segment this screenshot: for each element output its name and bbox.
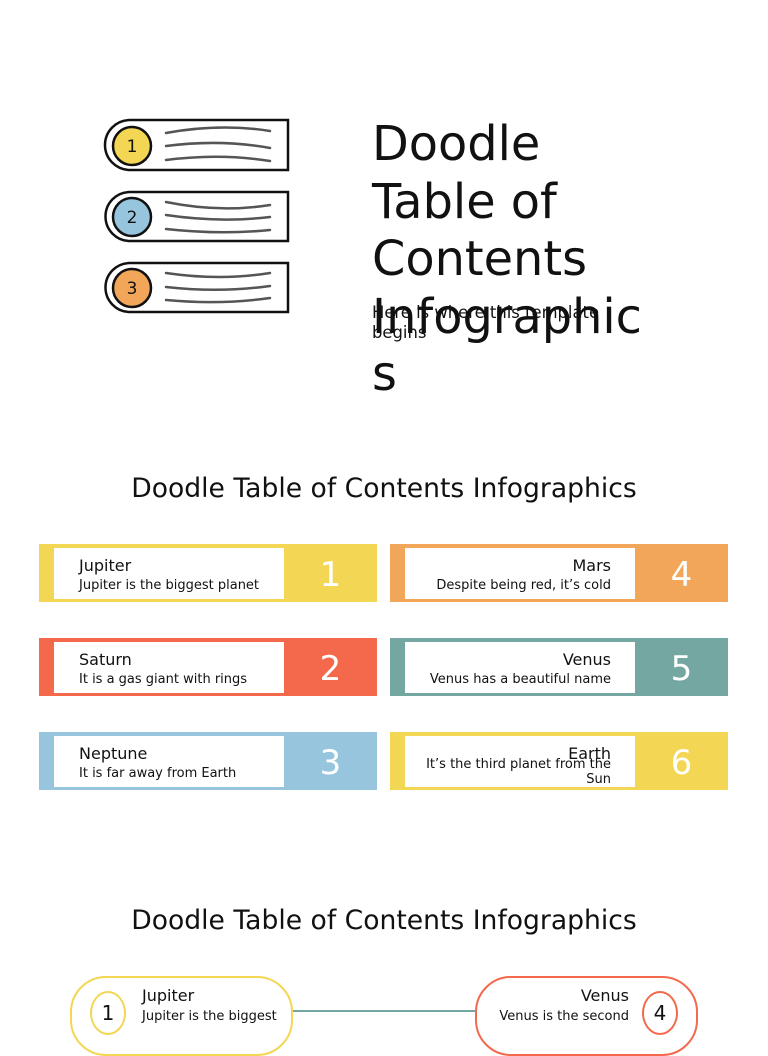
card: Mars: 4 (671, 555, 692, 595)
icon: table of contents doodle: 1 (127, 137, 137, 157)
pill: Venus: Venus is the second (499, 1009, 629, 1024)
card: Jupiter: Jupiter (79, 556, 131, 575)
title: Contents (372, 232, 587, 287)
card: Jupiter: 1 (320, 555, 341, 595)
card: Earth: 6 (671, 743, 692, 783)
card: Venus: Venus (563, 650, 611, 669)
card: Saturn (39, 638, 377, 696)
pill: Venus: Venus (581, 986, 629, 1005)
card: Venus: Venus has a beautiful name (430, 672, 611, 687)
pill: Jupiter: 1 (102, 1001, 114, 1025)
card: Jupiter (39, 544, 377, 602)
card: Neptune (39, 732, 377, 790)
subtitle: Here is where this template begins (372, 303, 599, 342)
card: Saturn: 2 (320, 649, 341, 689)
title: s (372, 347, 397, 402)
card: Venus (390, 638, 728, 696)
section heading 2: Doodle Table of Contents Infographics (131, 905, 637, 936)
icon: table of contents doodle (104, 118, 290, 314)
icon: table of contents doodle: 2 (127, 208, 137, 228)
title: Doodle (372, 117, 540, 172)
icon: table of contents doodle: 3 (127, 279, 137, 299)
card: Mars: Mars (572, 556, 611, 575)
card: Earth: Earth (568, 744, 611, 763)
card: Earth (390, 732, 728, 790)
pill: Jupiter: Jupiter (142, 986, 194, 1005)
connector line (293, 1010, 475, 1012)
card: Saturn: Saturn (79, 650, 132, 669)
title: Table of (372, 174, 557, 230)
card: Jupiter: Jupiter is the biggest planet (79, 578, 259, 593)
pill: Venus (475, 976, 698, 1056)
section heading 1: Doodle Table of Contents Infographics (131, 473, 637, 504)
card: Mars: Despite being red, it’s cold (436, 578, 611, 593)
card: Neptune: Neptune (79, 744, 147, 763)
pill: Jupiter (70, 976, 293, 1056)
card: Neptune: It is far away from Earth (79, 766, 236, 781)
card: Earth: It’s the third planet from the Sun (426, 757, 611, 787)
title: Infographic (372, 290, 642, 344)
title (372, 117, 642, 402)
pill: Jupiter: Jupiter is the biggest (142, 1009, 277, 1024)
pill: Venus: 4 (654, 1001, 666, 1025)
card: Saturn: It is a gas giant with rings (79, 672, 247, 687)
card: Venus: 5 (671, 649, 692, 689)
card: Neptune: 3 (320, 743, 341, 783)
card: Mars (390, 544, 728, 602)
